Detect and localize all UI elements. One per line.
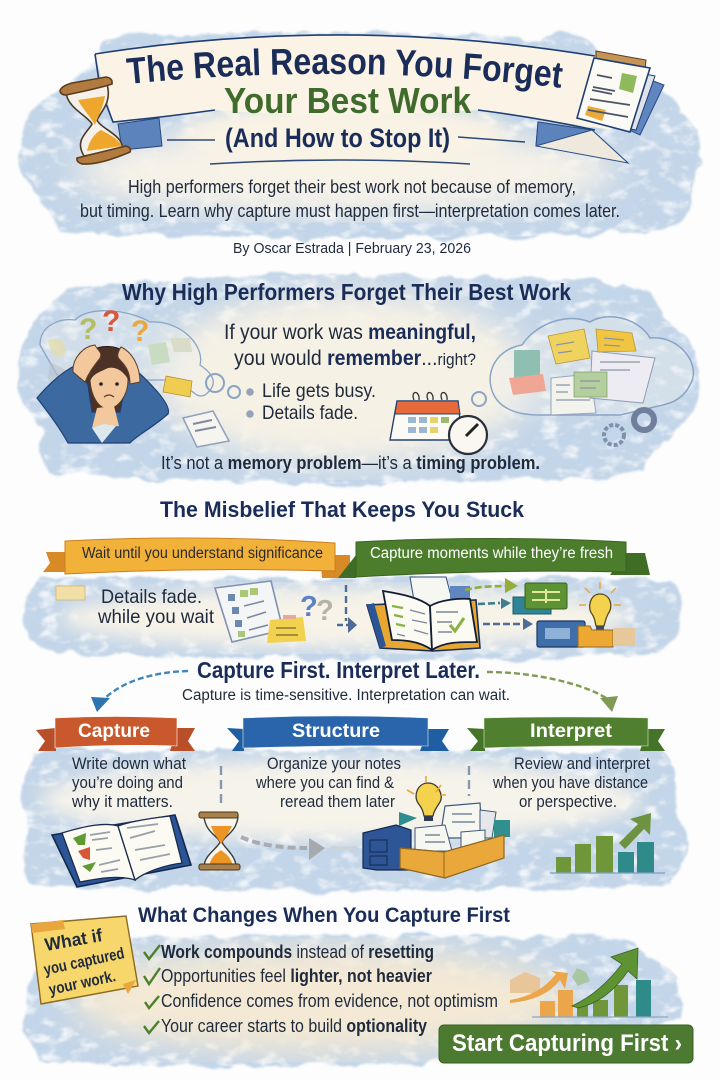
text: interpret bbox=[492, 755, 650, 811]
panel: header bbox=[17, 28, 704, 257]
watercolor band bbox=[25, 578, 679, 660]
heading: Why High Performers Forget Their Best Work bbox=[122, 279, 571, 305]
question text: If your work was meaningful, bbox=[224, 320, 476, 344]
thought bubble right small bbox=[472, 392, 486, 406]
text: structure: where you can find & bbox=[255, 774, 394, 792]
banner: wait: Wait until you understand significance bbox=[82, 545, 323, 562]
panel: what changes bbox=[25, 903, 693, 1066]
watercolor cloud: section two bbox=[19, 275, 699, 484]
misbelief text: Details fade. bbox=[101, 586, 202, 608]
subheading: Capture is time-sensitive. Interpretation can wait. bbox=[182, 687, 510, 704]
text: interpret: or perspective. bbox=[519, 793, 617, 811]
title: line two: Your Best Work bbox=[224, 80, 472, 121]
button bbox=[439, 1025, 693, 1063]
thought cloud: right bbox=[490, 317, 693, 415]
text: structure: reread them later bbox=[280, 793, 395, 811]
checklist: Opportunities feel lighter, not heavier bbox=[161, 965, 432, 986]
text: structure bbox=[255, 755, 401, 811]
banner: top edge bbox=[95, 35, 595, 130]
banner: capture bbox=[338, 538, 650, 578]
text: structure: Organize your notes bbox=[267, 755, 401, 773]
divider arrow bbox=[337, 585, 357, 633]
icon: paper bbox=[183, 411, 229, 447]
arrow: blue dashed bbox=[91, 671, 188, 712]
title: line one: The Real Reason You Forget bbox=[126, 48, 563, 92]
right notes bbox=[509, 329, 655, 445]
misbelief text: while you wait bbox=[97, 606, 215, 628]
question marks bbox=[79, 305, 149, 348]
text: capture: you’re doing and bbox=[72, 774, 183, 792]
text: interpret: Review and interpret bbox=[514, 755, 650, 773]
banner: capture: Capture bbox=[78, 721, 150, 742]
icon: envelope note bbox=[56, 586, 85, 600]
dividers bbox=[221, 766, 469, 806]
byline: By Oscar Estrada | February 23, 2026 bbox=[233, 240, 471, 257]
panel: three steps bbox=[22, 716, 688, 890]
subtitle: but timing. Learn why capture must happen first—interpretation comes later. bbox=[80, 201, 620, 221]
icon: output cards and bulb bbox=[513, 582, 635, 647]
flow arrows bbox=[465, 578, 533, 630]
question text bbox=[224, 320, 476, 370]
icon: document stack bbox=[577, 51, 664, 135]
button: Start Capturing First › bbox=[452, 1030, 682, 1057]
question marks: ? bbox=[102, 305, 120, 338]
icon: open book bbox=[367, 577, 480, 651]
ribbon: left fold bbox=[118, 118, 162, 150]
sticky note bbox=[31, 916, 138, 1004]
watercolor panel bbox=[25, 935, 683, 1066]
title: line three: (And How to Stop It) bbox=[225, 123, 450, 153]
checklist bbox=[144, 941, 498, 1036]
banner: cream scroll bbox=[95, 35, 612, 130]
banner: capture: Capture moments while they’re fresh bbox=[370, 545, 613, 562]
watercolor panel bbox=[22, 750, 688, 890]
banner: wait bbox=[43, 538, 350, 578]
misbelief text bbox=[97, 586, 215, 628]
text: capture: Write down what bbox=[72, 755, 186, 773]
closing line: It’s not a memory problem—it’s a timing problem. bbox=[161, 452, 540, 473]
icon: calendar and clock bbox=[390, 392, 487, 454]
question marks bbox=[300, 591, 334, 627]
question marks: ? bbox=[300, 591, 318, 623]
icon: checklist and sticky bbox=[215, 581, 306, 643]
icon: hourglass bbox=[199, 812, 240, 870]
icon: file box and bulb bbox=[363, 776, 510, 878]
heading: capture first: Capture First. Interpret Later. bbox=[197, 657, 480, 683]
question marks: ? bbox=[316, 595, 334, 627]
bullet list: Details fade. bbox=[262, 402, 358, 424]
checklist: Work compounds instead of resetting bbox=[161, 941, 434, 962]
text: capture: why it matters. bbox=[71, 793, 173, 811]
ribbon: right fold bbox=[536, 122, 628, 163]
panel: why high performers forget bbox=[19, 275, 699, 484]
question text: you would remember...right? bbox=[234, 346, 476, 370]
bullet list bbox=[246, 380, 376, 424]
title rules bbox=[167, 137, 525, 164]
banner: interpret: Interpret bbox=[530, 721, 613, 742]
checklist: Your career starts to build optionality bbox=[161, 1015, 428, 1036]
illustration: stressed woman bbox=[37, 345, 169, 443]
faded notes in thought cloud bbox=[48, 338, 192, 397]
ribbon: right fold blue bbox=[536, 122, 592, 146]
arrow: green dashed bbox=[487, 672, 618, 712]
cream glow behind subtitle heading bbox=[180, 101, 510, 169]
question marks: ? bbox=[131, 315, 149, 348]
bullet list: Life gets busy. bbox=[262, 380, 376, 402]
text: interpret: when you have distance bbox=[492, 774, 648, 792]
subtitle bbox=[80, 177, 620, 221]
thought cloud: left bbox=[40, 311, 213, 396]
chart: growth with arrow bbox=[510, 948, 668, 1017]
arrow: grey dashed bbox=[241, 837, 357, 860]
heading: The Misbelief That Keeps You Stuck bbox=[160, 497, 525, 522]
subtitle: High performers forget their best work not because of memory, bbox=[128, 177, 576, 197]
icon: hourglass bbox=[60, 77, 130, 164]
sticky note: your work. bbox=[47, 968, 117, 999]
sticky note: you captured bbox=[42, 945, 126, 979]
checklist: Confidence comes from evidence, not optimism bbox=[161, 990, 498, 1011]
chart: growth bars bbox=[550, 813, 665, 873]
watercolor cloud: header bbox=[16, 32, 701, 238]
panel: misbelief bbox=[25, 497, 679, 712]
thought bubbles left bbox=[206, 374, 240, 398]
heading: What Changes When You Capture First bbox=[138, 903, 510, 927]
banner: structure bbox=[227, 716, 449, 751]
banner: structure: Structure bbox=[292, 721, 380, 742]
icon: open book bbox=[52, 815, 191, 887]
sticky note: What if bbox=[43, 925, 105, 955]
banner: interpret bbox=[467, 717, 665, 751]
text: capture bbox=[71, 755, 186, 811]
question marks: ? bbox=[79, 313, 97, 346]
banner: capture bbox=[36, 716, 195, 751]
